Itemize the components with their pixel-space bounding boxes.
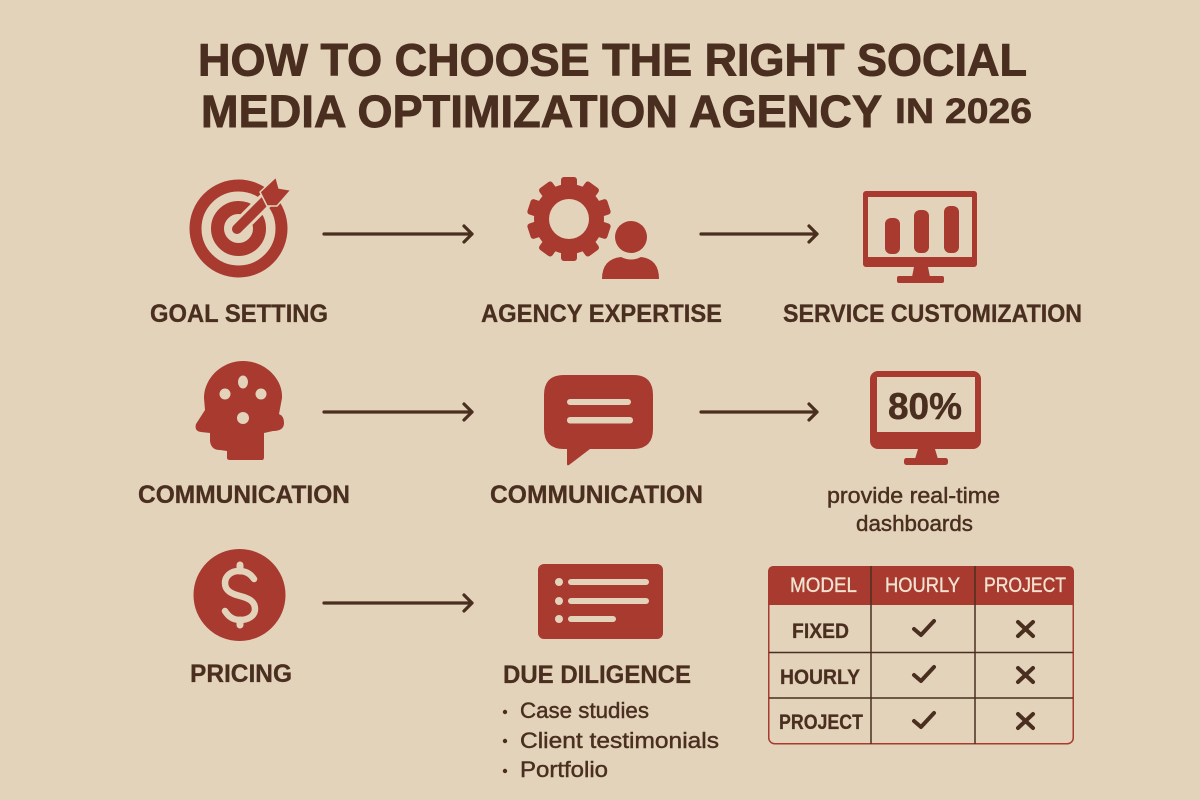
- panel: real-time dashboards: [827, 371, 1000, 536]
- panel: goal setting: [150, 177, 328, 328]
- icon: dollar coin: [194, 549, 286, 641]
- panel: agency expertise: [481, 177, 722, 328]
- icon: gear and person: [527, 177, 659, 279]
- label: pricing: PRICING: [190, 660, 292, 688]
- label: goal setting: GOAL SETTING: [150, 300, 328, 328]
- icon: checklist card: [538, 564, 663, 639]
- table row: hourly: HOURLY: [780, 666, 860, 689]
- table header: MODEL: [790, 574, 857, 597]
- label: due diligence: DUE DILIGENCE: [503, 661, 691, 689]
- table row: project: PROJECT: [779, 711, 863, 734]
- table header: HOURLY: [885, 574, 960, 597]
- list: due diligence items: Case studies: [520, 698, 649, 723]
- arrow: pricing to due diligence: [324, 595, 472, 611]
- label: agency expertise: AGENCY EXPERTISE: [481, 300, 722, 328]
- table header: [790, 574, 1066, 597]
- arrow: communication to dashboards: [701, 404, 817, 420]
- text: provide real-time dashboards: [827, 483, 1000, 536]
- icon: monitor with 80 percent: [870, 371, 981, 465]
- panel: communication, speech bubble: [490, 375, 703, 509]
- label: communication: COMMUNICATION: [138, 481, 350, 509]
- panel: service customization: [783, 191, 1082, 328]
- panel: pricing: [190, 549, 292, 688]
- table row: project: [779, 711, 1033, 734]
- icon: monitor with bar chart: [863, 191, 977, 283]
- title: MEDIA OPTIMIZATION AGENCY: [201, 86, 882, 137]
- title: IN 2026: [895, 92, 1032, 131]
- label: communication: COMMUNICATION: [490, 481, 703, 509]
- arrow: agency expertise to service customization: [701, 226, 817, 242]
- icon: monitor with 80 percent: 80%: [888, 386, 962, 427]
- title: [198, 34, 1032, 137]
- arrow: goal setting to agency expertise: [324, 226, 472, 242]
- panel: communication, head: [138, 361, 350, 509]
- text: provide real-time dashboards: provide real-time: [827, 483, 1000, 508]
- icon: head with dots: [196, 361, 284, 460]
- panel: due diligence: [503, 564, 719, 782]
- table row: hourly: [780, 666, 1033, 689]
- arrow: communication to communication: [324, 404, 472, 420]
- list: due diligence items: [503, 698, 719, 782]
- table row: fixed: [792, 620, 1033, 643]
- title: HOW TO CHOOSE THE RIGHT SOCIAL: [198, 34, 1027, 86]
- table header: PROJECT: [984, 574, 1066, 597]
- table row: fixed: FIXED: [792, 620, 849, 643]
- icon: target with arrow: [196, 177, 291, 272]
- list: due diligence items: Portfolio: [520, 757, 608, 782]
- table: pricing models: [768, 566, 1074, 744]
- list: due diligence items: Client testimonials: [520, 728, 719, 753]
- icon: speech bubble: [544, 375, 653, 465]
- label: service customization: SERVICE CUSTOMIZATION: [783, 300, 1082, 328]
- text: provide real-time dashboards: dashboards: [856, 511, 973, 536]
